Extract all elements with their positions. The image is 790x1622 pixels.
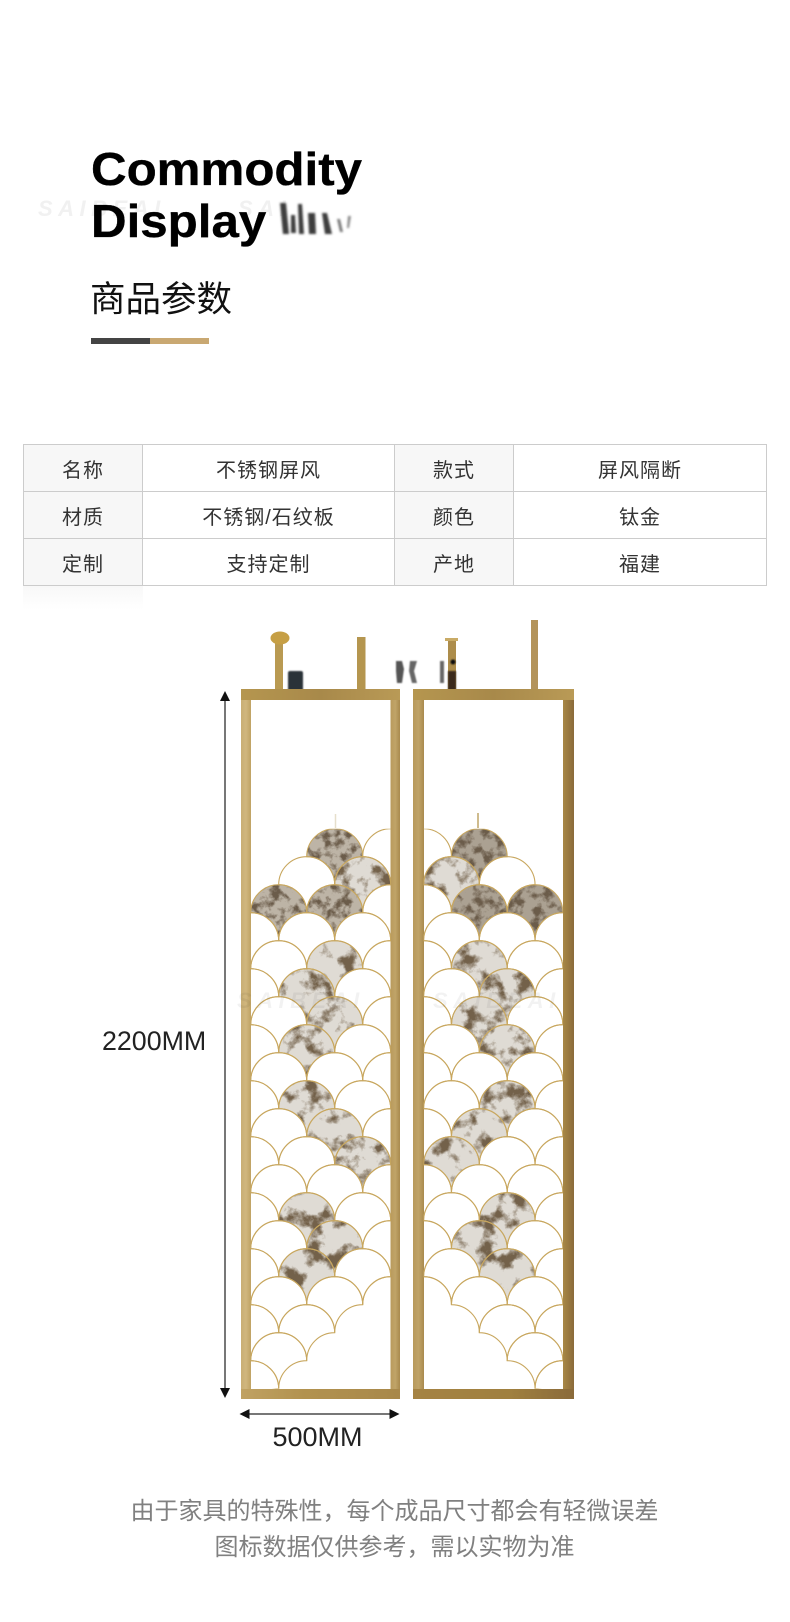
product illustration: screen with dimensions xyxy=(103,620,574,1446)
subtitle: 商品参数: 商品参数 xyxy=(90,279,232,319)
row 2 value right: 钛金 xyxy=(619,506,661,528)
row 2 value: 不锈钢/石纹板 xyxy=(202,506,335,528)
title line: Display: Display xyxy=(90,194,266,246)
row 1 label: 款式: 款式 xyxy=(433,460,475,482)
watermark over screen: right: SAIBEAI xyxy=(433,988,561,1013)
row 2 value right xyxy=(513,491,767,539)
watermark: faint brand text behind title: SAIBEAI xyxy=(38,196,166,221)
height arrow xyxy=(220,691,230,1398)
row 3 label: 定制: 定制 xyxy=(62,554,104,576)
row 3 value right: 福建 xyxy=(619,554,661,576)
row 3 label: 产地 xyxy=(394,538,514,586)
row 1 label: 款式 xyxy=(394,444,514,492)
row 3 value: 支持定制 xyxy=(226,554,310,576)
left panel scales xyxy=(251,828,391,1389)
right frame xyxy=(413,689,574,1399)
row 2 value xyxy=(142,491,395,539)
watermark: second faint brand text behind title: SAI xyxy=(238,196,291,221)
row 3 label: 定制 xyxy=(23,538,143,586)
row 1 value xyxy=(142,444,395,492)
row 1 value right: 屏风隔断 xyxy=(598,460,682,482)
right panel scales xyxy=(424,828,563,1389)
row 2 label: 材质 xyxy=(23,491,143,539)
left frame top posts xyxy=(270,632,366,689)
row 2 label: 材质: 材质 xyxy=(62,506,104,528)
row 1 label: 名称 xyxy=(23,444,143,492)
row 2 label: 颜色 xyxy=(394,491,514,539)
title line: Commodity: Commodity xyxy=(90,143,362,195)
left stone texture: light xyxy=(279,857,390,1298)
row 1 label: 名称: 名称 xyxy=(62,460,104,482)
row 3 value xyxy=(142,538,395,586)
left scale outlines xyxy=(250,828,391,1389)
right stone texture: light xyxy=(424,857,534,1298)
right stone texture: dark xyxy=(452,829,563,934)
smudges along top of frames xyxy=(288,660,456,692)
disclaimer line 1: 由于家具的特殊性，每个成品尺寸都会有轻微误差 xyxy=(130,1498,658,1525)
row 1 value: 不锈钢屏风 xyxy=(216,460,321,482)
right frame top posts xyxy=(445,620,538,689)
faded table remnant below table xyxy=(23,586,143,610)
width label: 500MM xyxy=(272,1422,363,1452)
row 3 label: 产地: 产地 xyxy=(433,554,475,576)
height label: 2200MM xyxy=(102,1026,206,1056)
accent bar xyxy=(91,338,209,344)
row 3 value right xyxy=(513,538,767,586)
small stems above top scales xyxy=(336,813,478,828)
width arrow xyxy=(240,1409,400,1419)
right scale outlines xyxy=(424,828,563,1389)
spec table xyxy=(23,444,767,586)
disclaimer line 2: 图标数据仅供参考，需以实物为准 xyxy=(214,1534,574,1561)
left frame xyxy=(241,689,400,1399)
row 2 label: 颜色: 颜色 xyxy=(433,506,475,528)
row 1 value right xyxy=(513,444,767,492)
left stone texture: dark xyxy=(251,828,362,934)
garbled smudge after title xyxy=(278,201,352,236)
watermark over screen: left: SAIBEAI xyxy=(237,988,365,1013)
